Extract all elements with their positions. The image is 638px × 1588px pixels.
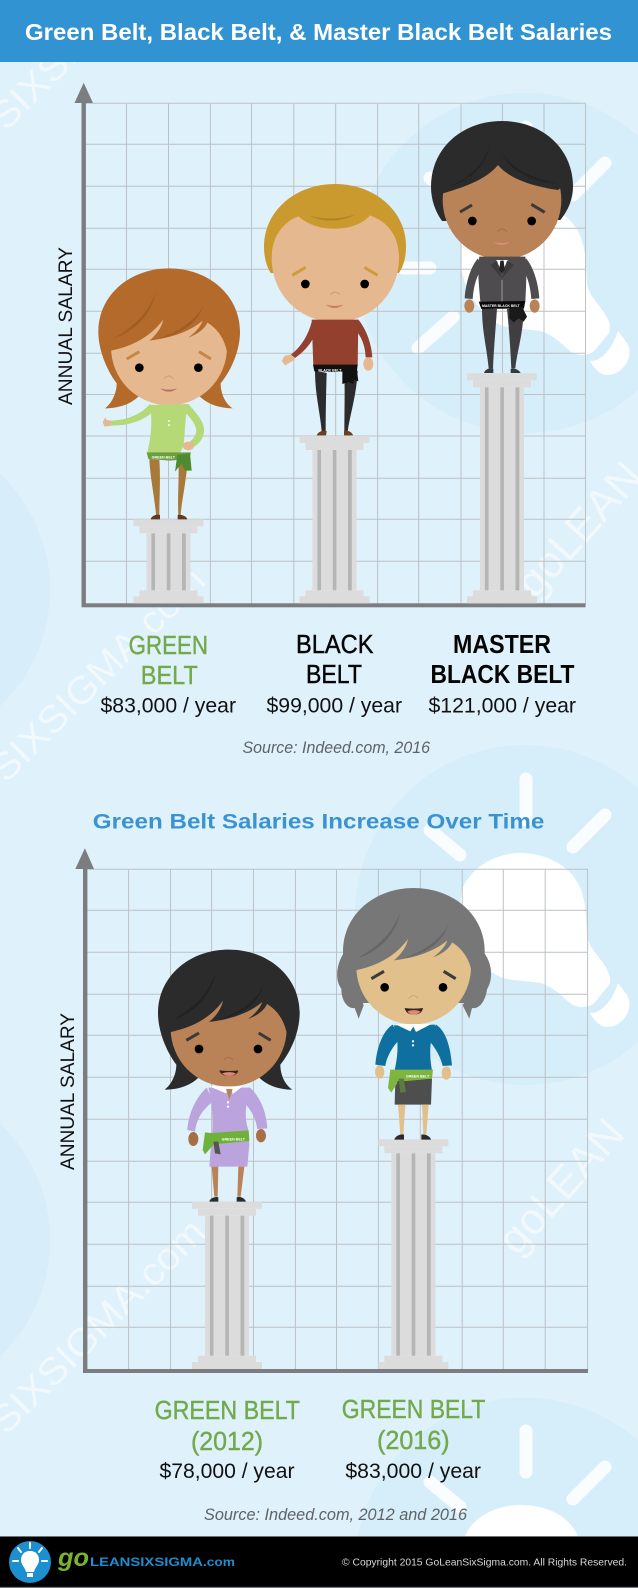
column: black belt: [300, 436, 370, 603]
chart 1 grid: [85, 103, 586, 605]
label: black belt: [266, 631, 402, 718]
logo wordmark: .com: [203, 1557, 235, 1569]
character: master black belt man: MASTER BLACK BELT: [482, 304, 521, 308]
chart 2 x axis: [83, 1369, 588, 1373]
character: green belt woman: [98, 268, 240, 519]
chart 1 x axis: [82, 603, 586, 607]
logo wordmark: go: [57, 1544, 89, 1572]
character: green belt 2012 woman: GREEN BELT: [222, 1137, 246, 1141]
label: master black belt: [428, 631, 576, 718]
chart 1: belt salaries: [55, 83, 586, 757]
subheading: Green Belt Salaries Increase Over Time: [93, 809, 544, 833]
chart 2: salaries over time: [57, 848, 588, 1524]
chart 2 y axis arrow: [75, 848, 94, 1373]
source note 1: Source: Indeed.com, 2016: [242, 738, 431, 757]
column: green belt 2016: [378, 1139, 448, 1369]
chart 2 grid: [86, 869, 588, 1370]
logo wordmark: [57, 1544, 235, 1572]
label: master black belt: MASTER: [453, 631, 551, 659]
character: master black belt man: [431, 121, 573, 373]
logo wordmark: LEANSIXSIGMA: [90, 1557, 203, 1569]
label: green belt 2012: (2012): [191, 1428, 263, 1456]
source note 2: Source: Indeed.com, 2012 and 2016: [204, 1505, 468, 1524]
label: green belt 2016: $83,000 / year: [345, 1460, 481, 1483]
label: green belt: $83,000 / year: [100, 695, 236, 718]
logo icon: light bulb: [9, 1541, 51, 1583]
background watermarks and bulbs: goLEAN: [488, 1109, 634, 1264]
label: green belt 2016: (2016): [377, 1427, 450, 1455]
character: green belt 2016 woman: [337, 888, 491, 1140]
label: master black belt: $121,000 / year: [428, 695, 576, 718]
label: black belt: $99,000 / year: [266, 695, 402, 718]
column: green belt: [134, 519, 204, 603]
character: black belt man: [264, 184, 406, 435]
header bar: [0, 0, 638, 62]
copyright: © Copyright 2015 GoLeanSixSigma.com. All Rights Reserved.: [342, 1557, 627, 1569]
label: master black belt: BLACK BELT: [430, 661, 575, 689]
label: green belt 2016: GREEN BELT: [342, 1396, 485, 1424]
column: master black belt: [467, 373, 537, 603]
title: Green Belt, Black Belt, & Master Black Belt Salaries: [25, 19, 612, 45]
label: green belt 2016: [342, 1396, 485, 1483]
footer: [0, 1536, 638, 1588]
label: black belt: BELT: [306, 661, 362, 689]
label: green belt 2012: GREEN BELT: [155, 1397, 300, 1425]
chart 1 y axis label: ANNUAL SALARY: [55, 247, 77, 405]
label: green belt: BELT: [141, 662, 198, 690]
label: black belt: BLACK: [296, 631, 374, 659]
character: green belt woman: GREEN BELT: [152, 456, 176, 460]
character: black belt man: BLACK BELT: [318, 368, 342, 372]
label: green belt: [100, 632, 236, 718]
character: green belt 2012 woman: [158, 950, 300, 1202]
column: green belt 2012: [192, 1202, 262, 1369]
label: green belt 2012: [155, 1397, 300, 1483]
character: green belt 2016 woman: GREEN BELT: [406, 1074, 430, 1078]
label: green belt: GREEN: [129, 632, 208, 660]
chart 2 y axis label: ANNUAL SALARY: [57, 1013, 79, 1170]
chart 1 y axis arrow: [74, 83, 93, 607]
label: green belt 2012: $78,000 / year: [160, 1460, 295, 1483]
